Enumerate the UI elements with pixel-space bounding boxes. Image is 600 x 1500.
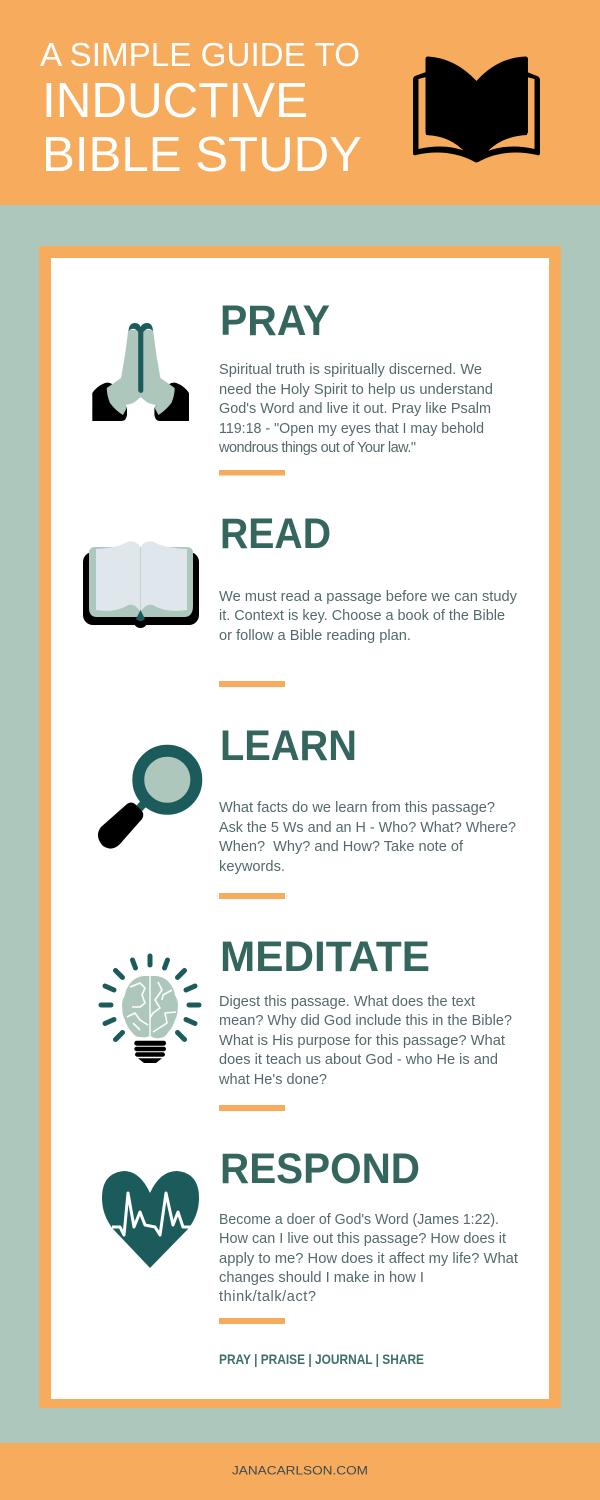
icon: bible [83, 541, 199, 628]
section: meditate [101, 933, 512, 1088]
footer website: JANACARLSON.COM [232, 1464, 368, 1478]
text: respond description: Become a doer of God's Word (James 1:22). [219, 1212, 499, 1228]
text: pray description [218, 362, 493, 456]
text: respond description: changes should I make in how I [219, 1270, 424, 1286]
heading: read: READ [220, 510, 331, 558]
text: meditate description: what He's done? [218, 1072, 327, 1088]
text: pray description: Spiritual truth is spiritually discerned. We [219, 362, 482, 378]
text: respond description: think/talk/act? [219, 1289, 316, 1305]
heading: learn: LEARN [220, 722, 357, 770]
text: learn description: Ask the 5 Ws and an H - Who? What? Where? [219, 820, 516, 836]
title: A SIMPLE GUIDE TO [40, 36, 360, 73]
text: read description [219, 589, 518, 644]
icon: magnifying glass [98, 751, 196, 849]
icon: brain light bulb [101, 956, 199, 1063]
header banner [0, 0, 600, 205]
heading: respond: RESPOND [220, 1145, 420, 1193]
section: read [83, 510, 518, 644]
text: meditate description [218, 994, 512, 1088]
text: learn description: keywords. [219, 859, 285, 875]
text: pray description: God's Word and live it out. Pray like Psalm [219, 401, 491, 417]
section: pray [92, 297, 493, 456]
title: BIBLE STUDY [42, 128, 362, 182]
footer banner [0, 1443, 600, 1500]
text: meditate description: does it teach us about God - who He is and [219, 1052, 498, 1068]
main panel [39, 246, 561, 1408]
text: meditate description: Digest this passage. What does the text [219, 994, 475, 1010]
heading: meditate: MEDITATE [220, 933, 430, 981]
icon: praying hands [92, 323, 189, 421]
text: read description: We must read a passage before we can study [219, 589, 518, 605]
text: respond description: How can I live out this passage? How does it [219, 1231, 506, 1247]
text: pray description: need the Holy Spirit to help us understand [219, 382, 493, 398]
section: learn [98, 722, 516, 875]
text: learn description: What facts do we learn from this passage? [219, 800, 495, 816]
heading: pray: PRAY [220, 297, 330, 345]
icon: open book [413, 56, 540, 162]
text: pray description: wondrous things out of Your law." [218, 440, 416, 456]
text: respond description: apply to me? How does it affect my life? What [219, 1251, 518, 1267]
section: respond [102, 1145, 518, 1305]
text: action list: PRAY | PRAISE | JOURNAL | SHARE [219, 1351, 424, 1367]
text: meditate description: What is His purpose for this passage? What [219, 1033, 505, 1049]
text: learn description [219, 800, 516, 875]
text: meditate description: mean? Why did God include this in the Bible? [219, 1013, 512, 1029]
text: read description: or follow a Bible reading plan. [219, 628, 411, 644]
text: pray description: 119:18 - "Open my eyes that I may behold [219, 421, 484, 437]
title: INDUCTIVE [42, 74, 308, 128]
icon: heart with pulse [102, 1171, 199, 1268]
text: read description: it. Context is key. Choose a book of the Bible [219, 608, 505, 624]
text: respond description [219, 1212, 518, 1305]
text: learn description: When? Why? and How? Take note of [219, 839, 464, 855]
title [40, 36, 362, 182]
